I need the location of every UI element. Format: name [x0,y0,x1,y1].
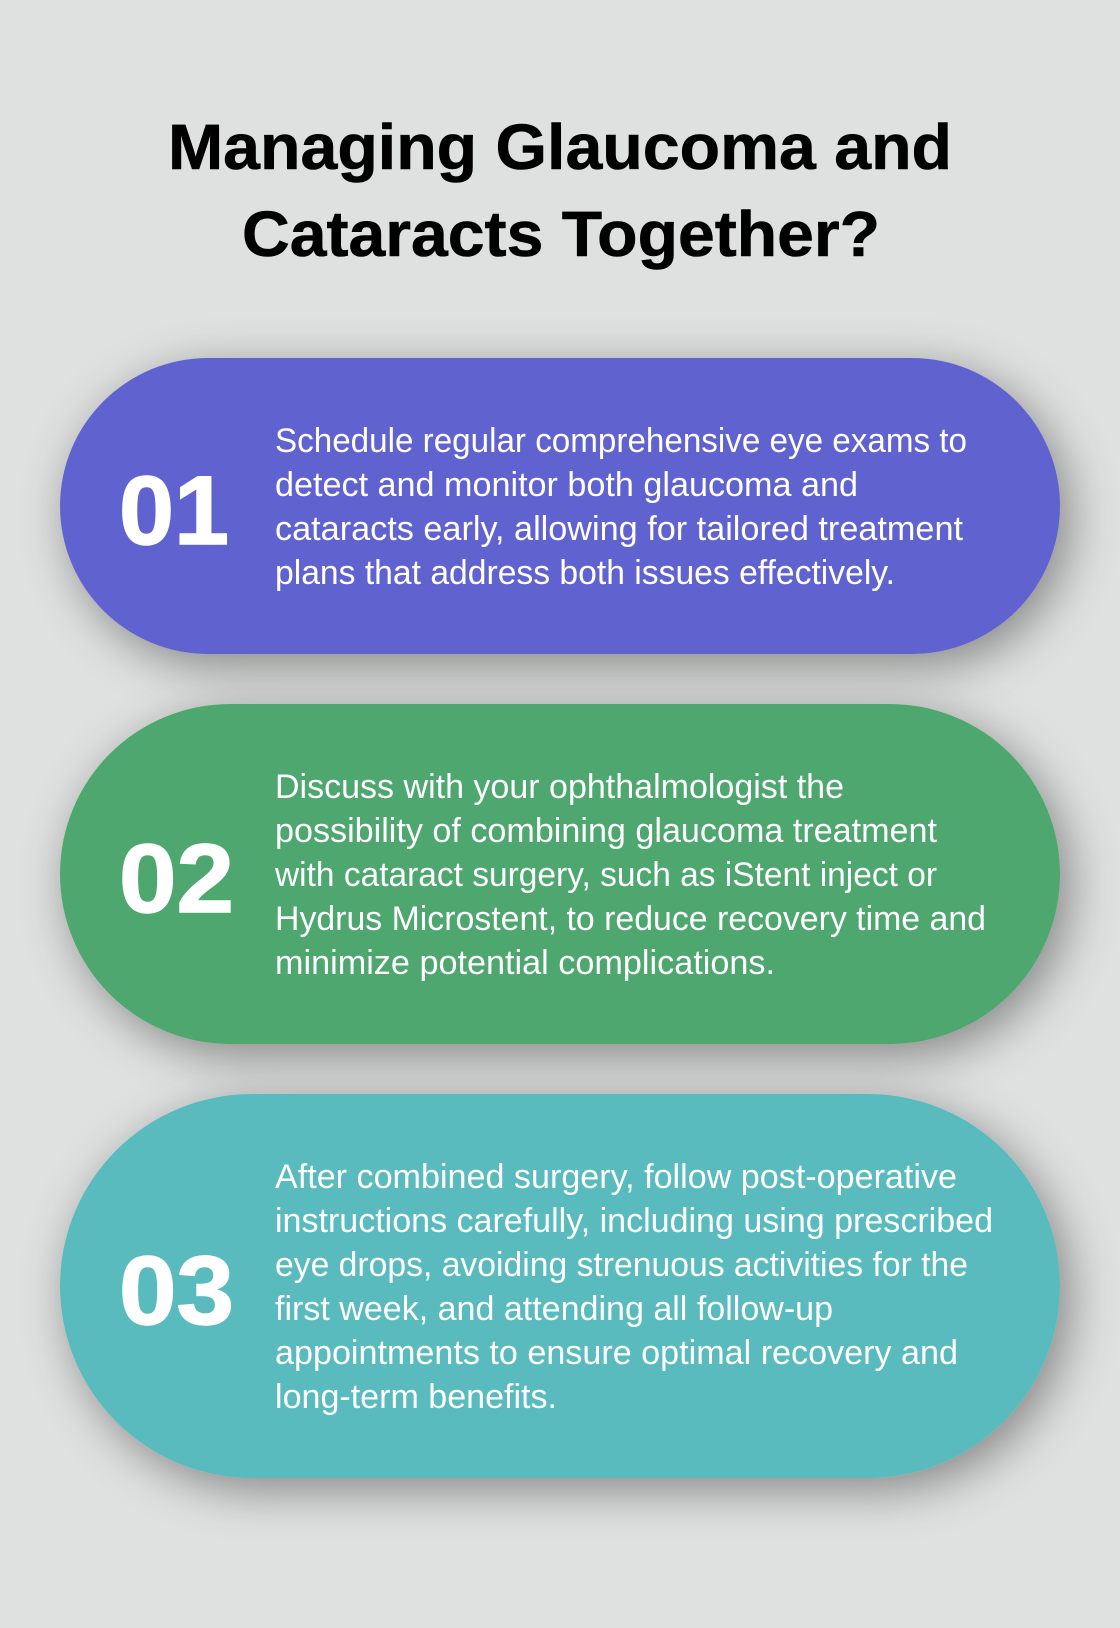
number 03: 03 [119,1236,234,1345]
text block 01: detect and monitor both glaucoma and [275,466,858,504]
text block 01: Schedule regular comprehensive eye exams to [275,422,967,460]
text block 03 [275,1158,993,1416]
text block 01: cataracts early, allowing for tailored treatment [275,510,964,548]
panel: step 01 [60,358,1060,654]
title: Cataracts Together? [242,198,880,270]
number 02: 02 [119,824,234,933]
text block 02: possibility of combining glaucoma treatment [275,812,938,850]
text block 01: plans that address both issues effectively. [275,554,895,592]
text block 02 [274,768,986,982]
text block 02: minimize potential complications. [275,944,775,982]
text block 03: eye drops, avoiding strenuous activities for the [275,1246,968,1284]
text block 03: instructions carefully, including using prescribed [275,1202,993,1240]
pill background 01 [60,358,1060,654]
pill background 02 [60,704,1060,1044]
panel: step 02 [60,704,1060,1044]
title [168,111,952,270]
text block 02: Discuss with your ophthalmologist the [275,768,844,806]
text block 03: After combined surgery, follow post-operative [275,1158,957,1196]
text block 03: first week, and attending all follow-up [275,1290,833,1328]
pill background 03 [60,1094,1060,1478]
title: Managing Glaucoma and [168,111,952,183]
text block 02: Hydrus Microstent, to reduce recovery time and [275,900,986,938]
number 01: 01 [119,456,229,565]
text block 02: with cataract surgery, such as iStent inject or [274,856,937,894]
text block 03: long-term benefits. [275,1378,557,1416]
panel: step 03 [60,1094,1060,1478]
text block 03: appointments to ensure optimal recovery and [275,1334,958,1372]
text block 01 [275,422,967,592]
